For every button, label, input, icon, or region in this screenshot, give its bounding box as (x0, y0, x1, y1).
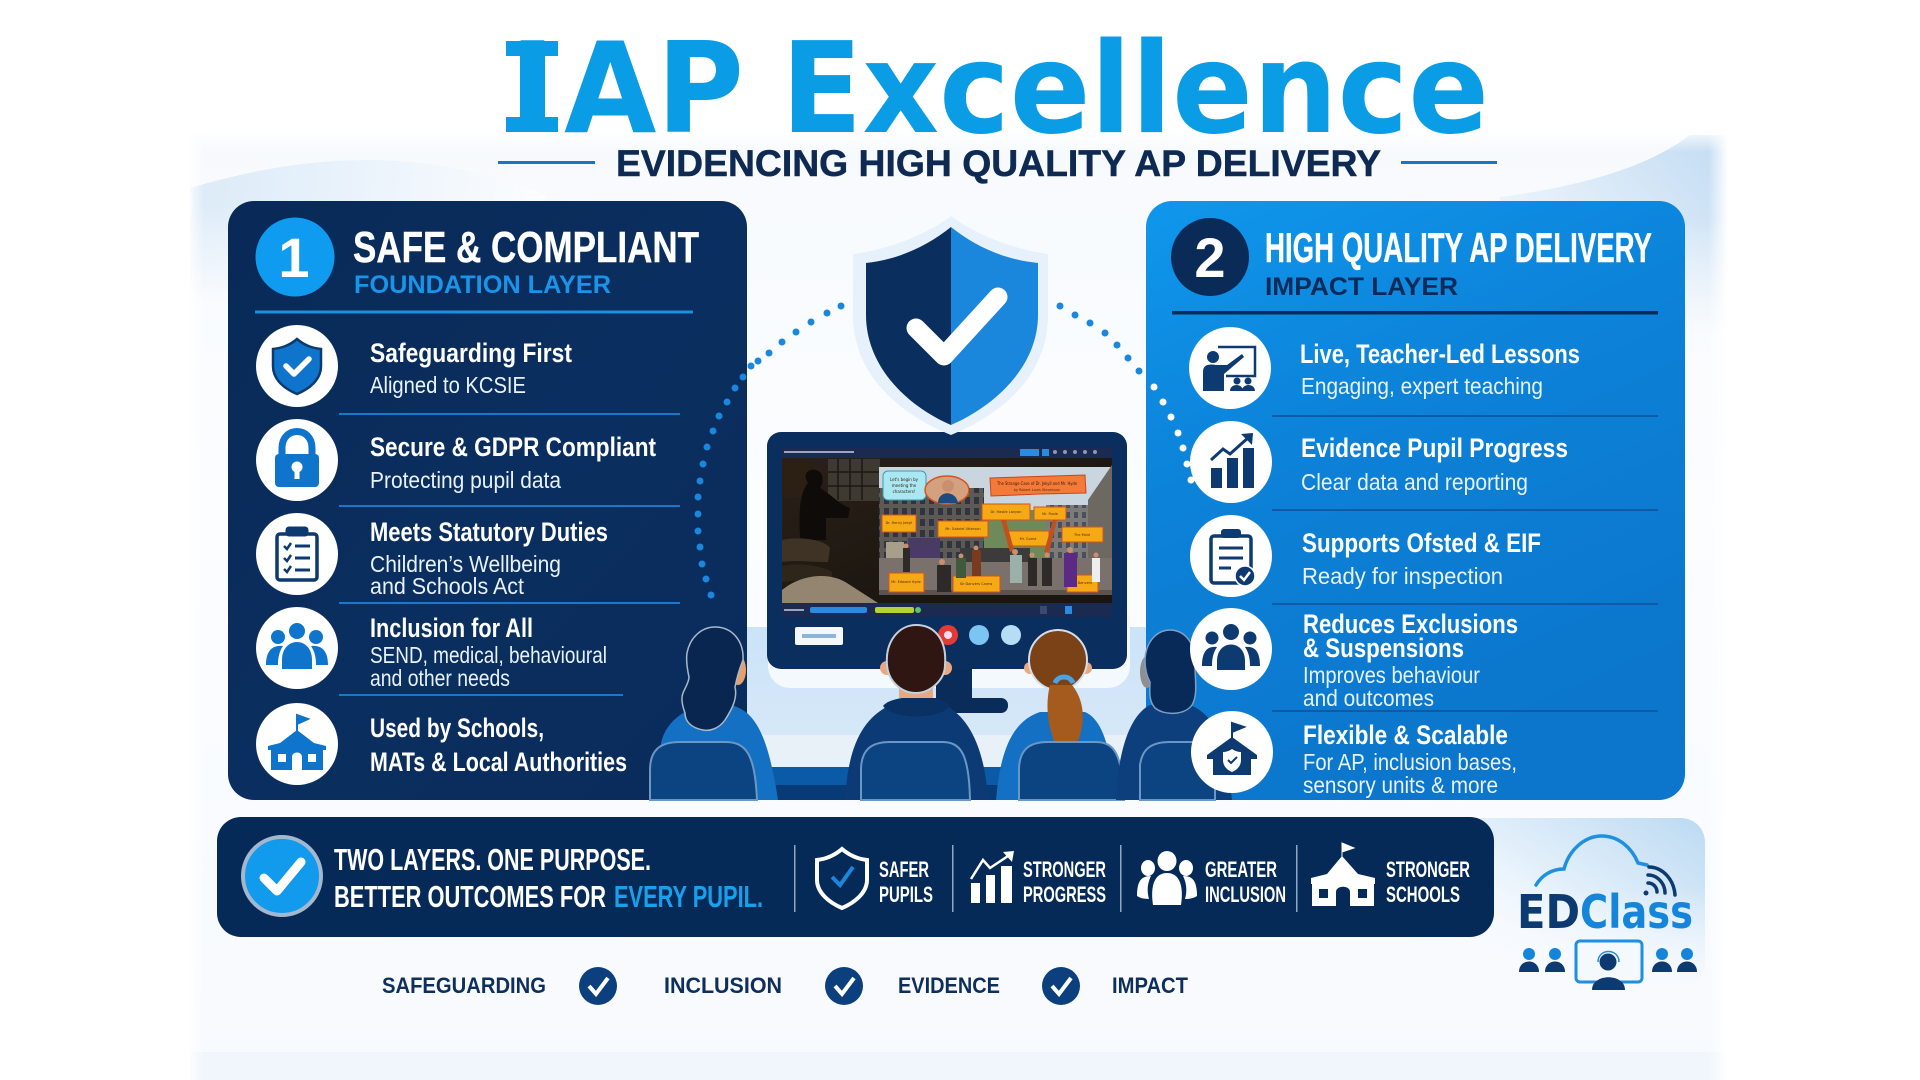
icon: shield check (273, 339, 321, 394)
icon: safer shield (817, 849, 867, 908)
item: reduces exclusions and suspensions (1190, 608, 1658, 712)
icon: learners (1519, 948, 1697, 972)
left panel header (255, 218, 699, 314)
panel: high quality delivery background (1146, 201, 1685, 800)
benefit: stronger schools (1386, 857, 1470, 907)
item: inclusion for all: Inclusion for All (370, 613, 533, 643)
icon: check 3 (1042, 967, 1080, 1005)
lesson screen: Sir Danvers (1072, 581, 1092, 585)
icon: people (1137, 851, 1197, 905)
benefit: greater inclusion: INCLUSION (1205, 882, 1286, 907)
lesson screen: meeting the (892, 483, 917, 488)
item: flexible and scalable: sensory units & more (1303, 772, 1498, 798)
item: used by schools: MATs & Local Authorities (370, 747, 627, 777)
benefit: stronger schools: STRONGER (1386, 857, 1470, 882)
check mark (916, 297, 998, 356)
icon: large check badge (243, 837, 321, 915)
lesson screen (782, 447, 1112, 617)
icon: clipboard with tick (1211, 529, 1255, 586)
benefit: greater inclusion: GREATER (1205, 857, 1277, 882)
item: inclusion for all (256, 607, 623, 696)
item: safeguarding first: Aligned to KCSIE (370, 372, 526, 398)
item: evidence pupil progress (1190, 421, 1658, 511)
number badge 2 (1171, 218, 1249, 296)
benefit: safer pupils (879, 857, 933, 907)
value strip: IMPACT (1112, 973, 1189, 998)
icon: rising bar chart (1211, 433, 1254, 488)
lesson screen: Dr. Henry Jekyll (886, 521, 912, 525)
left panel header: FOUNDATION LAYER (354, 271, 611, 299)
dotted arc right (1056, 302, 1194, 484)
benefit: greater inclusion (1205, 857, 1286, 907)
item: live teacher-led lessons: Live, Teacher-Led Lessons (1300, 339, 1580, 369)
icon: check 1 (579, 967, 617, 1005)
benefit: stronger progress: PROGRESS (1023, 882, 1106, 907)
lesson screen: Mr. Poole (1042, 512, 1058, 516)
number badge 2: 2 (1194, 226, 1226, 289)
icon: teacher screen (1576, 941, 1642, 990)
item: used by schools: Used by Schools, (370, 713, 544, 743)
benefit: safer pupils: PUPILS (879, 882, 933, 907)
item: flexible and scalable: Flexible & Scalable (1303, 720, 1508, 750)
right panel header: HIGH QUALITY AP DELIVERY (1265, 224, 1652, 271)
item: reduces exclusions and suspensions: and outcomes (1303, 685, 1434, 711)
value strip: EVIDENCE (898, 973, 1000, 998)
item: reduces exclusions and suspensions: Reduces Exclusions (1303, 609, 1518, 639)
student 1 (650, 627, 778, 800)
lesson screen: Mr. Edward Hyde (891, 580, 921, 584)
subtitle: EVIDENCING HIGH QUALITY AP DELIVERY (616, 143, 1381, 184)
student 3 (996, 630, 1124, 800)
benefit: stronger schools: SCHOOLS (1386, 882, 1460, 907)
logo: edclass: ED (1517, 885, 1580, 939)
lesson screen: Dr. Hastie Lanyon (990, 510, 1022, 514)
lesson screen: The Maid (1073, 533, 1090, 537)
icon: group of people navy (1202, 624, 1260, 670)
number badge 1 (256, 218, 334, 296)
item: supports ofsted and eif: Ready for inspection (1302, 563, 1503, 589)
number badge 1: 1 (278, 226, 310, 289)
background panel (186, 128, 1728, 1080)
item: supports ofsted and eif (1190, 515, 1658, 605)
item: supports ofsted and eif: Supports Ofsted & EIF (1302, 528, 1541, 558)
item: meets statutory duties: Meets Statutory Duties (370, 517, 608, 547)
lesson screen: Mr. Gabriel Utterson (945, 527, 981, 531)
item: reduces exclusions and suspensions: Improves behaviour (1303, 662, 1480, 688)
icon: school building (268, 715, 326, 770)
item: inclusion for all: SEND, medical, behavioural (370, 642, 607, 668)
value strip (382, 967, 1189, 1005)
item: secure and gdpr compliant (256, 419, 680, 507)
title: AP (564, 15, 744, 162)
item: meets statutory duties: and Schools Act (370, 573, 525, 599)
item: flexible and scalable (1191, 711, 1517, 798)
right panel header (1171, 218, 1658, 314)
icon: cloud outline (1536, 836, 1647, 885)
benefit: stronger progress (1023, 857, 1106, 907)
icon: wifi (1644, 867, 1675, 896)
lesson screen: Mr. Guest (1020, 537, 1037, 541)
item: evidence pupil progress: Evidence Pupil Progress (1301, 433, 1568, 463)
item: live teacher-led lessons: Engaging, expert teaching (1301, 373, 1543, 399)
item: meets statutory duties: Children’s Wellbeing (370, 551, 561, 577)
icon: check 2 (825, 967, 863, 1005)
shield emblem (853, 216, 1048, 435)
classroom backdrop (747, 600, 1146, 800)
icon: checklist clipboard (277, 527, 317, 580)
icon: progress chart (971, 851, 1014, 903)
item: live teacher-led lessons (1189, 327, 1658, 417)
item: secure and gdpr compliant: Protecting pupil data (370, 467, 561, 493)
title (506, 15, 1489, 162)
student 4 (1116, 630, 1232, 800)
left panel header: SAFE & COMPLIANT (353, 223, 699, 272)
benefit: stronger progress: STRONGER (1023, 857, 1106, 882)
bottom banner: BETTER OUTCOMES FOR (334, 879, 606, 914)
logo: edclass: Class (1580, 885, 1693, 939)
item: secure and gdpr compliant: Secure & GDPR Compliant (370, 432, 656, 462)
benefit: safer pupils: SAFER (879, 857, 929, 882)
value strip: INCLUSION (664, 973, 782, 998)
logo: edclass (1517, 836, 1697, 990)
monitor (767, 432, 1127, 713)
item: meets statutory duties (256, 513, 680, 604)
logo panel (1478, 818, 1705, 958)
lesson screen: Let's begin by (890, 477, 919, 482)
icon: padlock (275, 432, 319, 487)
bottom banner: EVERY PUPIL. (614, 879, 763, 914)
icon: teacher at board (1203, 347, 1255, 391)
lesson screen: characters! (893, 489, 915, 494)
icon: house with shield (1207, 723, 1257, 775)
item: flexible and scalable: For AP, inclusion bases, (1303, 749, 1517, 775)
dotted arc left (694, 302, 844, 598)
icon: school (1311, 843, 1375, 906)
lesson screen: The Strange Case of Dr. Jekyll and Mr. Hyde (996, 481, 1077, 486)
title: Excellence (781, 15, 1489, 162)
student 2 (845, 625, 988, 800)
bottom banner: TWO LAYERS. ONE PURPOSE. (334, 842, 651, 877)
bottom banner (217, 817, 1494, 937)
item: inclusion for all: and other needs (370, 665, 510, 691)
item: evidence pupil progress: Clear data and reporting (1301, 469, 1528, 495)
panel: safe and compliant background (228, 201, 747, 800)
value strip: SAFEGUARDING (382, 973, 546, 998)
title: I (509, 15, 556, 162)
icon: group of people (266, 623, 328, 669)
lesson screen: Sir Danvers Carew (960, 582, 992, 586)
item: safeguarding first: Safeguarding First (370, 338, 572, 368)
item: used by schools (256, 703, 627, 785)
item: reduces exclusions and suspensions: & Suspensions (1303, 633, 1464, 663)
item: safeguarding first (256, 325, 680, 415)
right panel header: IMPACT LAYER (1265, 273, 1458, 301)
lesson screen: by Robert Louis Stevenson (1014, 488, 1060, 492)
